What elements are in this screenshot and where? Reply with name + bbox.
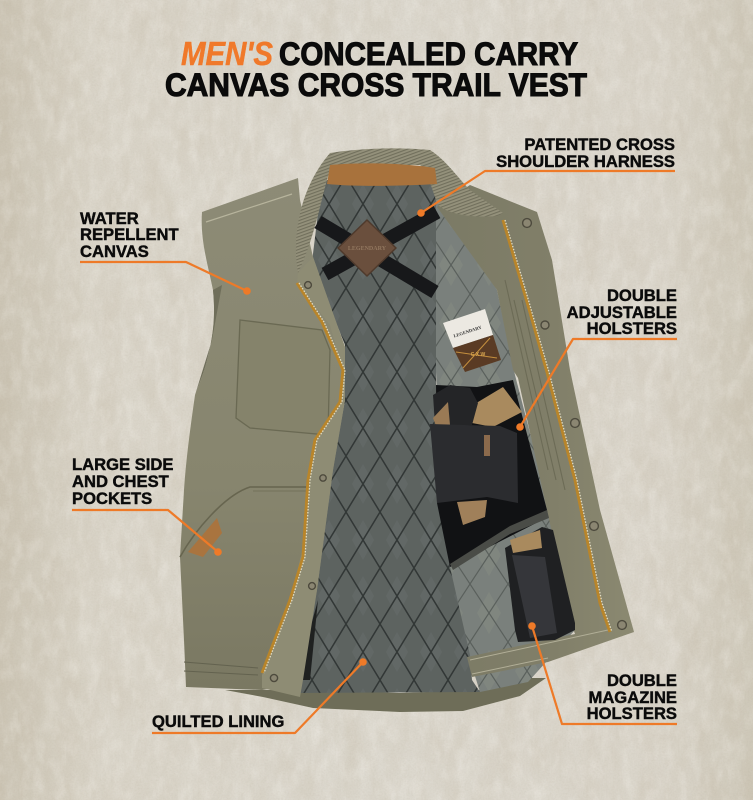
- back hem band: [225, 678, 546, 712]
- title line 1: CONCEALED CARRY: [279, 36, 578, 72]
- collar tan lining: [327, 163, 437, 186]
- collar ribbed band: [296, 148, 503, 273]
- title: [165, 35, 587, 103]
- label: water repellent canvas: [80, 209, 251, 295]
- label: quilted lining: [152, 658, 367, 733]
- right front panel: [437, 185, 634, 677]
- holster tan magazine: [472, 387, 522, 427]
- label: water repellent canvas: REPELLENT: [80, 225, 179, 244]
- label: water repellent canvas: CANVAS: [80, 242, 149, 261]
- label: patented cross shoulder harness: SHOULDER HARNESS: [496, 152, 675, 171]
- leather harness patch: [338, 220, 396, 276]
- black fleece holster panel: [436, 380, 548, 567]
- double magazine holster: [505, 527, 575, 642]
- label: patented cross shoulder harness: PATENTED CROSS: [524, 135, 675, 154]
- chest pocket: [236, 320, 330, 435]
- harness straps: [318, 212, 437, 292]
- left hem stitching: [184, 662, 258, 675]
- dark gap at lower lining: [296, 600, 318, 680]
- vest illustration: [180, 148, 634, 712]
- label: double adjustable holsters: HOLSTERS: [587, 319, 677, 338]
- title line 2: CANVAS CROSS TRAIL VEST: [165, 67, 587, 103]
- label: double magazine holsters: [528, 622, 677, 724]
- pocket leather patch: [188, 518, 222, 557]
- label: large side and chest pockets: AND CHEST: [72, 472, 169, 491]
- label: patented cross shoulder harness: [417, 135, 675, 217]
- double adjustable holster: [430, 385, 522, 525]
- label: double magazine holsters: DOUBLE: [607, 671, 677, 690]
- side pocket: [180, 487, 308, 557]
- right hem band stitch: [470, 630, 608, 674]
- right lining lighter quilt: [430, 185, 575, 692]
- label: large side and chest pockets: POCKETS: [72, 489, 152, 508]
- snap buttons: [270, 219, 626, 682]
- label: double adjustable holsters: [516, 286, 677, 431]
- label: large side and chest pockets: [72, 455, 222, 556]
- brand label: [443, 309, 501, 372]
- harness straps: LEGENDARY: [348, 246, 387, 252]
- lining back quilted: [295, 180, 480, 693]
- label: large side and chest pockets: LARGE SIDE: [72, 455, 173, 474]
- label: double magazine holsters: HOLSTERS: [587, 704, 677, 723]
- label: double adjustable holsters: DOUBLE: [607, 286, 677, 305]
- left front panel: [180, 178, 345, 690]
- label: water repellent canvas: WATER: [80, 209, 139, 228]
- brand label: C X W: [471, 352, 485, 358]
- right zipper: [503, 220, 610, 632]
- brand label: LEGENDARY: [453, 324, 483, 338]
- label: double magazine holsters: MAGAZINE: [588, 688, 677, 707]
- title accent: MEN'S: MEN'S: [181, 35, 273, 72]
- label: double adjustable holsters: ADJUSTABLE: [567, 303, 677, 322]
- left zipper: [262, 283, 343, 673]
- left placket: [262, 257, 345, 697]
- label: quilted lining: QUILTED LINING: [152, 712, 284, 731]
